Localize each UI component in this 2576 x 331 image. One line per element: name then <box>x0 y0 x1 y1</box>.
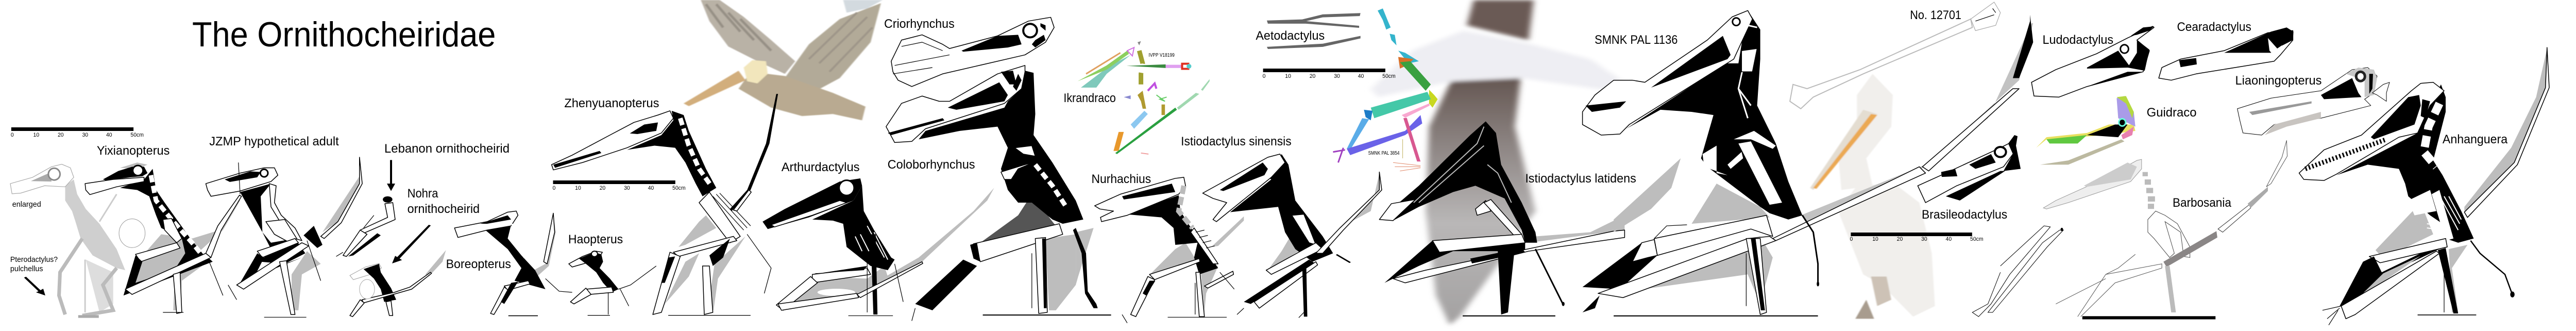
skeleton: Yixianopterus <box>85 162 242 313</box>
skull: Guidraco in colour <box>2036 96 2136 164</box>
skeleton: Coloborhynchus <box>864 65 1111 321</box>
skeleton: JZMP hypothetical adult <box>206 157 362 317</box>
skeleton: Nurhachius <box>1095 177 1244 323</box>
scale bar: 0 to 50 cm left: 20 <box>58 132 64 138</box>
label: enlarged: enlarged <box>12 201 41 209</box>
label: Aetodactylus: Aetodactylus <box>1256 28 1325 42</box>
label: Arthurdactylus: Arthurdactylus <box>782 160 860 174</box>
label: Pterodactylus? pulchellus: pulchellus <box>10 265 43 273</box>
scale bar: 0 to 50 cm left: 50cm <box>130 132 144 138</box>
scale bar: 0 to 50 cm near pelican <box>1850 233 1984 242</box>
skull: Ludodactylus <box>2031 26 2154 97</box>
label: Zhenyuanopterus: Zhenyuanopterus <box>564 96 659 110</box>
photo: dark and white bird seen from below <box>1371 0 1624 325</box>
scale bar: 0 to 50 cm Aetodactylus: 40 <box>1358 73 1364 79</box>
skeleton: Barbosania <box>2043 140 2287 319</box>
scale bar: 0 to 50 cm left: 40 <box>106 132 112 138</box>
arrow: to Pterodactylus pulchellus <box>24 277 45 295</box>
label: Cearadactylus: Cearadactylus <box>2177 20 2251 34</box>
label: Nurhachius: Nurhachius <box>1091 172 1151 186</box>
scale bar: 0 to 50 cm Aetodactylus: 0 <box>1263 73 1265 79</box>
skull: Brasileodactylus <box>1918 135 2021 203</box>
skull: Aetodactylus jaws <box>1267 13 1361 49</box>
label: Brasileodactylus: Brasileodactylus <box>1922 207 2007 221</box>
bone and skull: No. 12701 <box>1790 2 2001 109</box>
arrow: to Lebanon ornithocheirid <box>387 160 395 191</box>
scale bar: 0 to 50 cm Zhenyuanopterus <box>553 180 686 191</box>
label: Anhanguera: Anhanguera <box>2443 132 2507 146</box>
scale bar: 0 to 50 cm Aetodactylus: 30 <box>1334 73 1340 79</box>
colour diagram: Ikrandraco IVPP V18199 <box>1077 41 1210 154</box>
label: Ikrandraco: Ikrandraco <box>1063 91 1116 105</box>
label: Nohra ornithocheirid: ornithocheirid <box>408 202 480 216</box>
colour diagram: SMNK PAL 3854 <box>1333 8 1438 171</box>
scale bar: 0 to 50 cm left: 0 <box>11 132 14 138</box>
skeleton: Boreopterus <box>454 211 572 316</box>
skeleton: Istiodactylus sinensis <box>1202 154 1382 318</box>
label: Ludodactylus: Ludodactylus <box>2043 32 2113 46</box>
label: Coloborhynchus: Coloborhynchus <box>888 157 975 171</box>
skeleton: Haopterus <box>569 251 656 316</box>
photo: brown pelican in flight <box>684 0 883 120</box>
scale bar: 0 to 50 cm near pelican: 50cm <box>1970 236 1984 242</box>
arrow: to Nohra ornithocheirid <box>392 225 431 263</box>
scale bar: 0 to 50 cm Aetodactylus: 10 <box>1285 73 1291 79</box>
label: Lebanon ornithocheirid: Lebanon ornithocheirid <box>384 141 510 155</box>
scale bar: 0 to 50 cm near pelican: 30 <box>1921 236 1927 242</box>
skull: Cearadactylus <box>2159 27 2294 80</box>
label: SMNK PAL 3854: SMNK PAL 3854 <box>1368 151 1400 156</box>
label: Barbosania: Barbosania <box>2173 195 2231 209</box>
skull: Criorhynchus <box>891 18 1054 87</box>
label: Haopterus: Haopterus <box>568 232 623 246</box>
scale bar: 0 to 50 cm Zhenyuanopterus: 30 <box>624 185 630 191</box>
scale bar: 0 to 50 cm Aetodactylus: 50cm <box>1382 73 1396 79</box>
photo: white pelican standing <box>1810 74 1935 319</box>
label: Guidraco: Guidraco <box>2147 105 2196 119</box>
skeleton: Nohra ornithocheirid <box>350 250 446 317</box>
scale bar: 0 to 50 cm near pelican: 20 <box>1897 236 1903 242</box>
scale bar: 0 to 50 cm left: 30 <box>82 132 88 138</box>
label: Criorhynchus: Criorhynchus <box>884 16 955 30</box>
skeleton: Zhenyuanopterus <box>552 94 778 316</box>
enlarged skeleton: Yixianopterus in grey <box>10 164 145 318</box>
skull: Liaoningopterus <box>2238 68 2389 135</box>
label: Pterodactylus? pulchellus: Pterodactylus? <box>10 256 58 264</box>
label: Nohra ornithocheirid: Nohra <box>408 186 438 200</box>
label: Istiodactylus latidens: Istiodactylus latidens <box>1525 171 1636 185</box>
scale bar: 0 to 50 cm near pelican: 40 <box>1946 236 1952 242</box>
skeleton: Anhanguera <box>2299 47 2549 325</box>
scale bar: 0 to 50 cm Zhenyuanopterus: 50cm <box>672 185 686 191</box>
scale bar: 0 to 50 cm Zhenyuanopterus: 10 <box>575 185 581 191</box>
scale bar: 0 to 50 cm Zhenyuanopterus: 20 <box>600 185 605 191</box>
scale bar: 0 to 50 cm near pelican: 0 <box>1850 236 1853 242</box>
label: No. 12701: No. 12701 <box>1910 8 1961 22</box>
scale bar: 0 to 50 cm Aetodactylus <box>1263 69 1396 79</box>
scale bar: 0 to 50 cm near pelican: 10 <box>1872 236 1878 242</box>
skeleton: SMNK PAL 1136 <box>1583 10 2033 317</box>
label: SMNK PAL 1136: SMNK PAL 1136 <box>1595 32 1677 46</box>
label: Istiodactylus sinensis: Istiodactylus sinensis <box>1181 134 1292 148</box>
label: IVPP V18199: IVPP V18199 <box>1148 53 1175 58</box>
skeleton: Istiodactylus latidens <box>1379 121 1624 317</box>
title: The Ornithocheiridae <box>192 15 496 54</box>
skeleton: Lebanon ornithocheirid wing fragment <box>336 196 395 256</box>
skeleton: Arthurdactylus <box>762 178 923 316</box>
label: Yixianopterus: Yixianopterus <box>97 143 170 157</box>
scale bar: 0 to 50 cm left <box>11 127 144 138</box>
label: Liaoningopterus: Liaoningopterus <box>2235 73 2321 87</box>
label: Boreopterus: Boreopterus <box>446 257 511 271</box>
wing outline: Brasileodactylus limb <box>1972 226 2063 317</box>
scale bar: 0 to 50 cm Zhenyuanopterus: 0 <box>553 185 555 191</box>
scale bar: 0 to 50 cm Aetodactylus: 20 <box>1310 73 1315 79</box>
scale bar: 0 to 50 cm Zhenyuanopterus: 40 <box>648 185 654 191</box>
scale bar: 0 to 50 cm left: 10 <box>33 132 39 138</box>
label: JZMP hypothetical adult: JZMP hypothetical adult <box>209 134 339 148</box>
